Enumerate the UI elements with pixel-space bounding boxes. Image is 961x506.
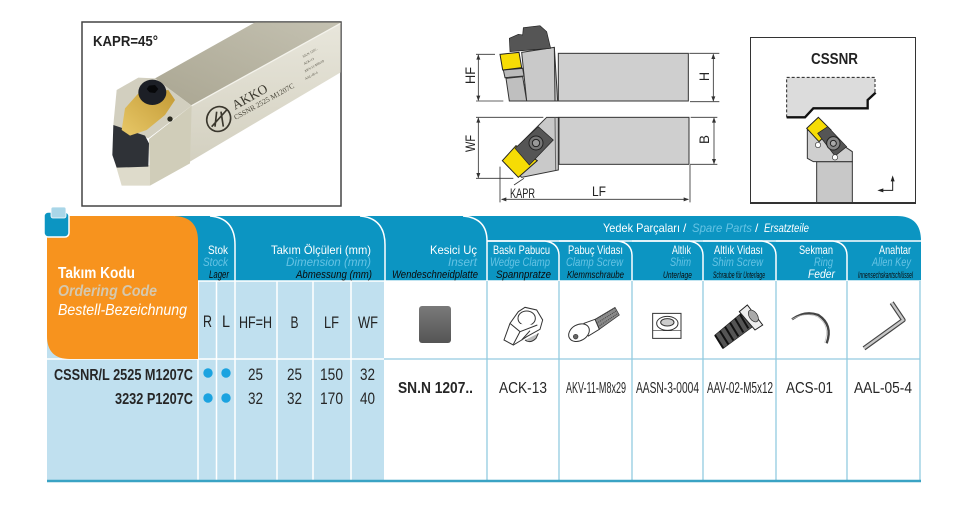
column labels: B [290,313,298,332]
dimension labels: LF [592,183,606,199]
header: stock [203,243,230,281]
header: clamp screw: Klemmschraube [567,270,624,281]
header: allen key: Innensechskantschlüssel [858,270,914,280]
spare part codes: ACK-13 [499,380,547,397]
header: ring: Feder [808,267,836,281]
header: allen key: Anahtar [879,243,911,257]
column labels: WF [358,313,378,332]
header: stock: Stok [208,243,229,257]
dimension values: 25 [248,366,263,384]
technical drawing: dimensions [462,26,719,202]
spare part codes: AKV-11-M8x29 [566,380,626,397]
spare part codes [499,380,912,397]
photo: tool holder [112,22,341,186]
header: spare parts: / [683,221,687,235]
header: dimensions [271,243,372,281]
dimension labels: H [696,72,712,81]
header: shim: Unterlage [663,270,692,281]
header: allen key: Allen Key [871,255,912,269]
dimension labels: HF [462,67,478,84]
spare part codes: AASN-3-0004 [636,380,699,397]
table background cells [47,216,921,481]
header: shim screw: Schraube für Unterlage [713,270,765,280]
photo: tool holder: AKV-11-M8x29 [304,59,325,73]
header: ring: Ring [814,255,833,269]
header: clamp screw: Pabuç Vidası [568,243,623,257]
header: spare parts: Ersatzteile [764,221,809,235]
panel: ordering code heading: Takım Kodu [58,265,135,282]
spare part codes: AAL-05-4 [854,380,912,397]
header: insert: Kesici Uç [430,243,477,257]
icon: insert [419,306,451,343]
icon: wedge clamp [504,307,543,345]
row: codes: 3232 P1207C [115,391,193,408]
icon: shim [653,313,681,338]
photo: tool holder: AKKO [229,81,270,113]
header: shim screw [712,243,765,280]
dimension values: 32 [287,390,302,408]
dimension labels: B [696,135,712,144]
dimension values: 32 [360,366,375,384]
header: clamp screw [566,243,624,281]
header: allen key [858,243,914,280]
panel: product photo [82,22,341,206]
dimension labels: KAPR [510,185,535,201]
panel: ordering code heading: Bestell-Bezeichnung [58,302,187,319]
dimension values [248,366,375,408]
dimension labels: WF [462,135,478,152]
photo: tool holder: CSSNR 2525 M1207C [232,81,296,122]
header: shim: Shim [670,255,691,269]
icon: ring [792,313,829,343]
dimension values: 150 [320,366,343,384]
dimension values: 32 [248,390,263,408]
column labels: L [222,312,230,331]
header: insert [392,243,478,281]
header: spare parts: Yedek Parçaları [603,221,680,235]
icon: shim screw [715,305,763,348]
label: KAPR angle: KAPR=45° [93,33,158,50]
row: codes [54,367,193,408]
panel: CSSNR machining diagram [750,38,916,204]
icon: corner tab [44,207,69,237]
header: shim [663,243,692,281]
header: dimensions: Abmessung (mm) [295,269,372,281]
table: ordering data [44,207,921,481]
header: insert: Insert [448,255,478,269]
header: ring: Sekman [799,243,833,257]
header: wedge clamp: Spannpratze [496,269,551,281]
photo: tool holder: ACK-13 [303,57,315,66]
dimension values: 40 [360,390,375,408]
dimension labels [462,67,712,201]
header: clamp screw: Clamp Screw [566,255,624,269]
column labels [203,312,378,332]
header: spare parts: Spare Parts [692,221,752,235]
photo: tool holder: AAL-05-4 [304,70,319,81]
header: wedge clamp: Wedge Clamp [490,255,550,269]
spare part codes: AAV-02-M5x12 [707,380,773,397]
header: shim screw: Altlık Vidası [714,243,763,257]
icon: allen key [864,303,903,348]
header: spare parts: / [755,221,759,235]
photo: tool holder: SN.N 1207.. [302,47,319,59]
column labels: HF=H [239,313,272,332]
header: dimensions: Dimension (mm) [286,255,371,269]
logo: AKKO [206,106,232,132]
header: shim screw: Shim Screw [712,255,764,269]
header: ring [799,243,836,281]
header: shim: Altlık [672,243,692,257]
stock dots [203,368,231,403]
panel: ordering code heading [47,216,198,359]
header: insert: Wendeschneidplatte [392,269,478,281]
column labels: R [203,312,212,331]
heading: CSSNR: CSSNR [811,51,858,68]
header: stock: Lager [209,269,230,281]
dimension values: 170 [320,390,343,408]
panel: ordering code heading: Ordering Code [58,283,157,300]
row: codes: CSSNR/L 2525 M1207C [54,367,193,384]
spare part codes: ACS-01 [786,380,833,397]
header: spare parts [603,221,809,235]
insert code: SN.N 1207.. [398,380,473,397]
header: dimensions: Takım Ölçüleri (mm) [271,243,371,257]
header: stock: Stock [203,255,229,269]
dimension values: 25 [287,366,302,384]
header: wedge clamp: Baskı Pabucu [493,243,550,257]
icon: clamp screw [565,307,619,345]
column labels: LF [324,313,339,332]
header: wedge clamp [490,243,551,281]
